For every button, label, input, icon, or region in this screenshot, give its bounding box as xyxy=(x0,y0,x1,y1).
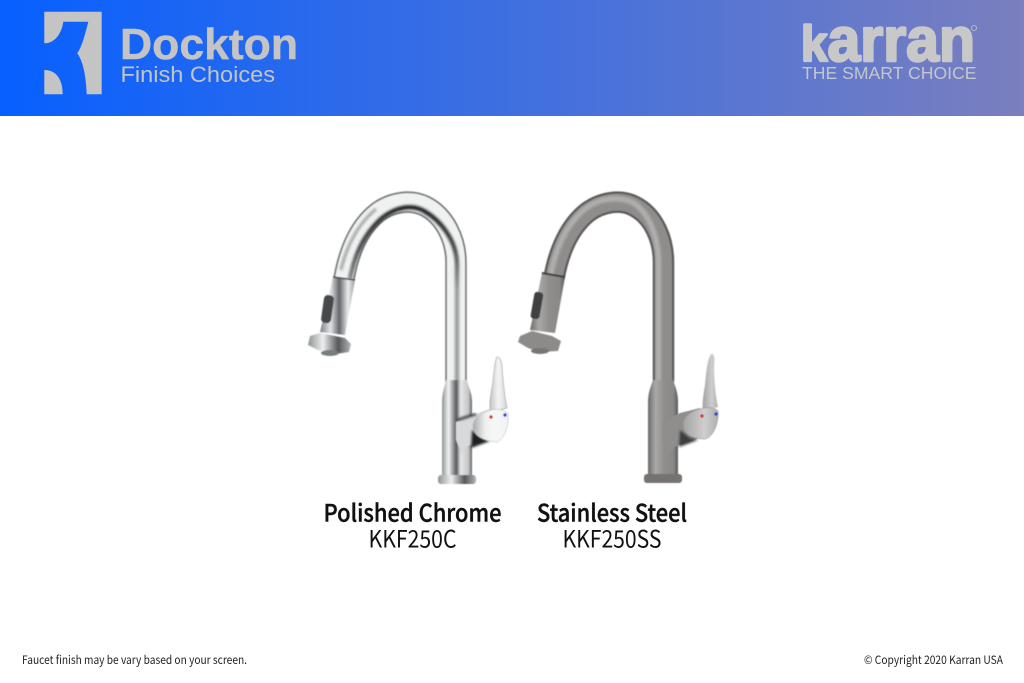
lever handle xyxy=(703,354,718,411)
heading: Dockton: Dockton xyxy=(120,20,298,69)
handle disc xyxy=(473,409,508,442)
label: Stainless Steel xyxy=(537,494,687,554)
Karran logo: THE SMART CHOICE xyxy=(802,63,976,83)
faucet: polished chrome xyxy=(308,202,508,484)
base flange xyxy=(438,475,476,484)
spout tube xyxy=(550,199,664,382)
body column xyxy=(442,380,472,476)
faucet: stainless steel xyxy=(518,199,718,483)
body column xyxy=(648,380,678,476)
connector xyxy=(456,408,492,455)
spray head xyxy=(308,277,355,356)
label: Stainless Steel: Stainless Steel xyxy=(537,494,687,528)
label: Polished Chrome: KKF250C xyxy=(368,520,456,554)
connector xyxy=(662,408,700,458)
spout tube xyxy=(341,202,457,382)
icon: Dockton logo mark xyxy=(44,12,102,94)
footnote: Faucet finish may be vary based on your screen. xyxy=(22,652,247,668)
label: Stainless Steel: KKF250SS xyxy=(562,520,662,554)
Karran logo: karran xyxy=(801,6,975,75)
handle disc xyxy=(683,408,718,439)
label: Polished Chrome: Polished Chrome xyxy=(324,494,502,528)
subheading: Finish Choices: Finish Choices xyxy=(120,62,275,87)
lever handle xyxy=(490,357,507,412)
copyright: © Copyright 2020 Karran USA xyxy=(864,652,1003,668)
base flange xyxy=(644,474,682,483)
header banner xyxy=(0,0,1024,116)
label: Polished Chrome xyxy=(324,494,502,554)
spray head xyxy=(518,273,565,354)
